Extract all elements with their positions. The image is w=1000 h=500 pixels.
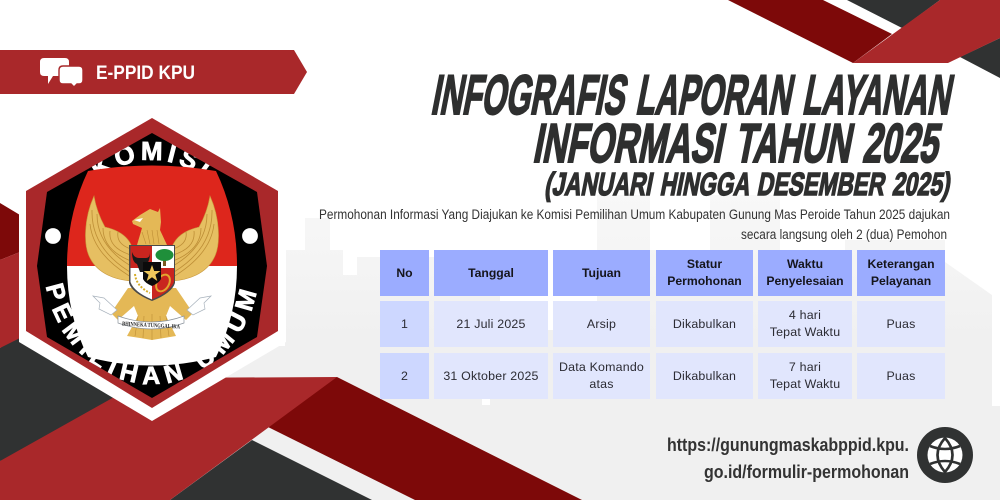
row 2: purpose: atas: [589, 377, 614, 391]
row 1: purpose: Arsip: [587, 317, 616, 331]
website address: go.id/formulir-permohonan: [704, 462, 909, 482]
header: Tanggal: [434, 250, 548, 296]
icon: Garuda Pancasila: [85, 196, 219, 340]
header: Tanggal: Tanggal: [468, 266, 514, 280]
body, legs and tail: [111, 288, 193, 340]
header: Keterangan Pelayanan: Keterangan: [867, 257, 935, 271]
header: Waktu Penyelesaian: Waktu: [787, 257, 823, 271]
website address: [667, 435, 909, 482]
shield: black centre with star: [143, 262, 161, 286]
row 2: status: [656, 353, 753, 399]
right wing: [172, 196, 219, 281]
icon: chat bubbles: [40, 58, 83, 87]
decoration: left side ribbons: [0, 203, 170, 461]
header: Keterangan Pelayanan: Pelayanan: [871, 274, 931, 288]
header: Statur Permohonan: Permohonan: [667, 274, 742, 288]
logo red and white field: [67, 166, 237, 366]
row 1: status: [656, 301, 753, 347]
decoration: bottom ribbons: [0, 377, 582, 500]
row 1: completion time: Tepat Waktu: [770, 325, 840, 339]
motto ribbon: [93, 296, 211, 331]
left wing: [85, 196, 132, 281]
header: Waktu Penyelesaian: Penyelesaian: [766, 274, 844, 288]
icon: globe: [917, 427, 973, 483]
header: Waktu Penyelesaian: [758, 250, 852, 296]
title: [428, 63, 959, 202]
header: Statur Permohonan: [656, 250, 753, 296]
row 1: service note: [857, 301, 945, 347]
description text: [319, 207, 950, 242]
motto ribbon: BHINNEKA TUNGGAL IKA: [122, 321, 181, 331]
row 1: date: 21 Juli 2025: [456, 317, 526, 331]
row 1: service note: Puas: [886, 317, 916, 331]
logo ring lettering: [45, 142, 258, 385]
neck and head: [132, 208, 167, 245]
header: Tujuan: Tujuan: [582, 266, 621, 280]
row 2: date: 31 Oktober 2025: [443, 369, 539, 383]
row 2: completion time: Tepat Waktu: [770, 377, 840, 391]
row 1: completion time: [758, 301, 852, 347]
decoration: top right ribbons: [728, 0, 1000, 78]
row 2: completion time: 7 hari: [789, 360, 821, 374]
row 2: purpose: [553, 353, 650, 399]
row 1: date: [434, 301, 548, 347]
banner label: E-PPID KPU: [96, 63, 195, 84]
logo: KPU hexagon emblem: [19, 118, 286, 421]
row 1: status: Dikabulkan: [673, 317, 736, 331]
description text: secara langsung oleh 2 (dua) Pemohon: [741, 227, 947, 242]
row 2: completion time: [758, 353, 852, 399]
row 2: service note: Puas: [886, 369, 916, 383]
row 1: number: [380, 301, 429, 347]
row 1: number: 1: [401, 317, 408, 331]
shield: [129, 245, 175, 301]
row 2: purpose: Data Komando: [559, 360, 644, 374]
shield: banyan tree: [156, 249, 174, 266]
shield: chain ring: [153, 272, 173, 294]
row 2: number: [380, 353, 429, 399]
banner: E-PPID KPU: [0, 50, 307, 94]
website address: https://gunungmaskabppid.kpu.: [667, 435, 909, 455]
logo ring lettering: PEMILIHAN UMUM: [46, 282, 257, 385]
row 2: number: 2: [401, 369, 408, 383]
shield: rice and cotton: [135, 274, 150, 293]
header: Statur Permohonan: Statur: [687, 257, 722, 271]
table: information requests: [380, 250, 945, 399]
background city skyline: [0, 195, 1000, 500]
row 2: service note: [857, 353, 945, 399]
row 1: purpose: [553, 301, 650, 347]
shield: bull head: [132, 252, 150, 272]
header: No: [380, 250, 429, 296]
header: Tujuan: [553, 250, 650, 296]
row 1: completion time: 4 hari: [789, 308, 821, 322]
header: Keterangan Pelayanan: [857, 250, 945, 296]
row 2: status: Dikabulkan: [673, 369, 736, 383]
logo ring lettering: KOMISI: [92, 142, 210, 170]
header: No: No: [396, 266, 413, 280]
row 2: date: [434, 353, 548, 399]
